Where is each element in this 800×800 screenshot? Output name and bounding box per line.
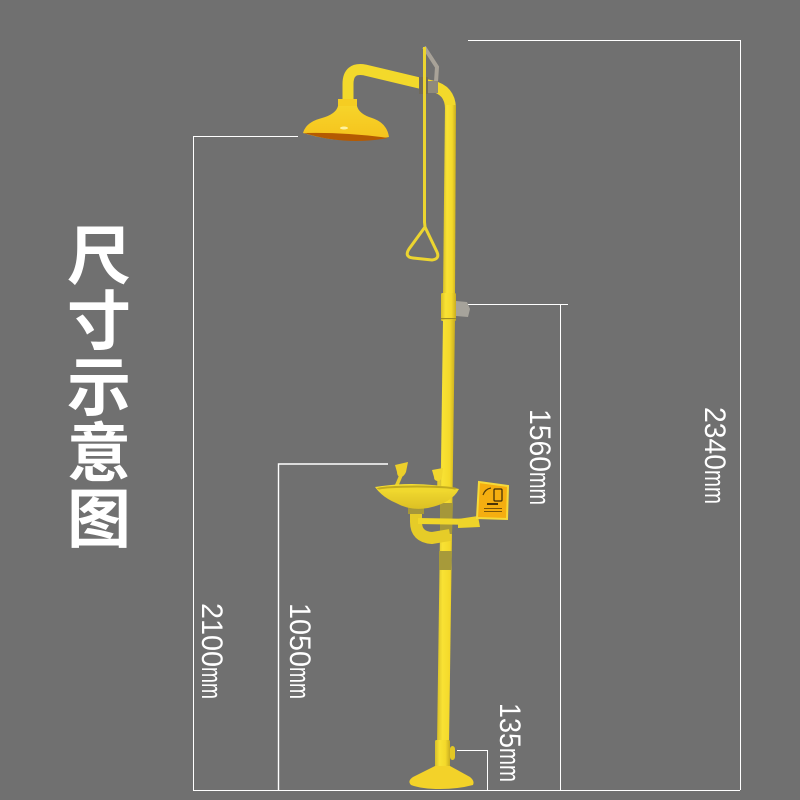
upper pole bbox=[443, 105, 456, 296]
label: 135mm: 135 bbox=[493, 703, 526, 748]
dimension lines: 135 bbox=[457, 750, 488, 790]
label: 1050mm: mm bbox=[283, 667, 315, 699]
arm clamp bbox=[419, 77, 438, 94]
pull rod and handle bbox=[407, 47, 438, 260]
coupling bbox=[441, 293, 456, 321]
side arm bbox=[418, 521, 478, 522]
title: 尺 bbox=[67, 221, 131, 293]
overhead arm bbox=[348, 70, 450, 108]
dimension lines: 2340 bbox=[468, 40, 740, 790]
label: 2100mm: mm bbox=[195, 667, 227, 699]
label: 2100mm bbox=[195, 603, 228, 699]
label: 2340mm bbox=[698, 407, 731, 504]
title: 图 bbox=[67, 484, 131, 556]
dimension lines: 1050 bbox=[278, 464, 388, 790]
push plate bbox=[477, 482, 508, 519]
nozzle right bbox=[432, 468, 443, 490]
title: 示 bbox=[67, 352, 131, 424]
nozzle left bbox=[395, 462, 408, 487]
U pipe bbox=[416, 510, 450, 538]
label: 1050mm: 1050 bbox=[283, 603, 316, 667]
shower head bbox=[303, 99, 389, 141]
label: 135mm bbox=[493, 703, 526, 782]
valve bbox=[456, 301, 470, 317]
dimension lines: 1560 bbox=[468, 304, 568, 790]
label: 1560mm: mm bbox=[523, 472, 555, 505]
label: 1560mm bbox=[523, 409, 556, 505]
emergency shower unit bbox=[303, 47, 508, 789]
pole olive sections bbox=[440, 503, 453, 534]
dimension lines: 2100 bbox=[194, 136, 298, 790]
label: 2100mm: 2100 bbox=[195, 603, 228, 667]
lower pole bbox=[437, 320, 455, 745]
title: 寸 bbox=[67, 286, 131, 358]
title bbox=[67, 221, 131, 556]
pull rod bracket bbox=[424, 47, 437, 82]
base plate bbox=[409, 766, 474, 789]
title: 意 bbox=[67, 418, 131, 490]
baseline bbox=[193, 790, 740, 792]
bowl mount bbox=[408, 507, 424, 514]
bowl bbox=[375, 484, 459, 509]
label: 2340mm: 2340 bbox=[698, 407, 731, 470]
label: 135mm: mm bbox=[493, 748, 525, 782]
label: 2340mm: mm bbox=[698, 470, 730, 504]
label: 1050mm bbox=[283, 603, 316, 699]
label: 1560mm: 1560 bbox=[523, 409, 556, 472]
eyewash assembly bbox=[375, 462, 508, 538]
foot collar bbox=[435, 740, 455, 768]
